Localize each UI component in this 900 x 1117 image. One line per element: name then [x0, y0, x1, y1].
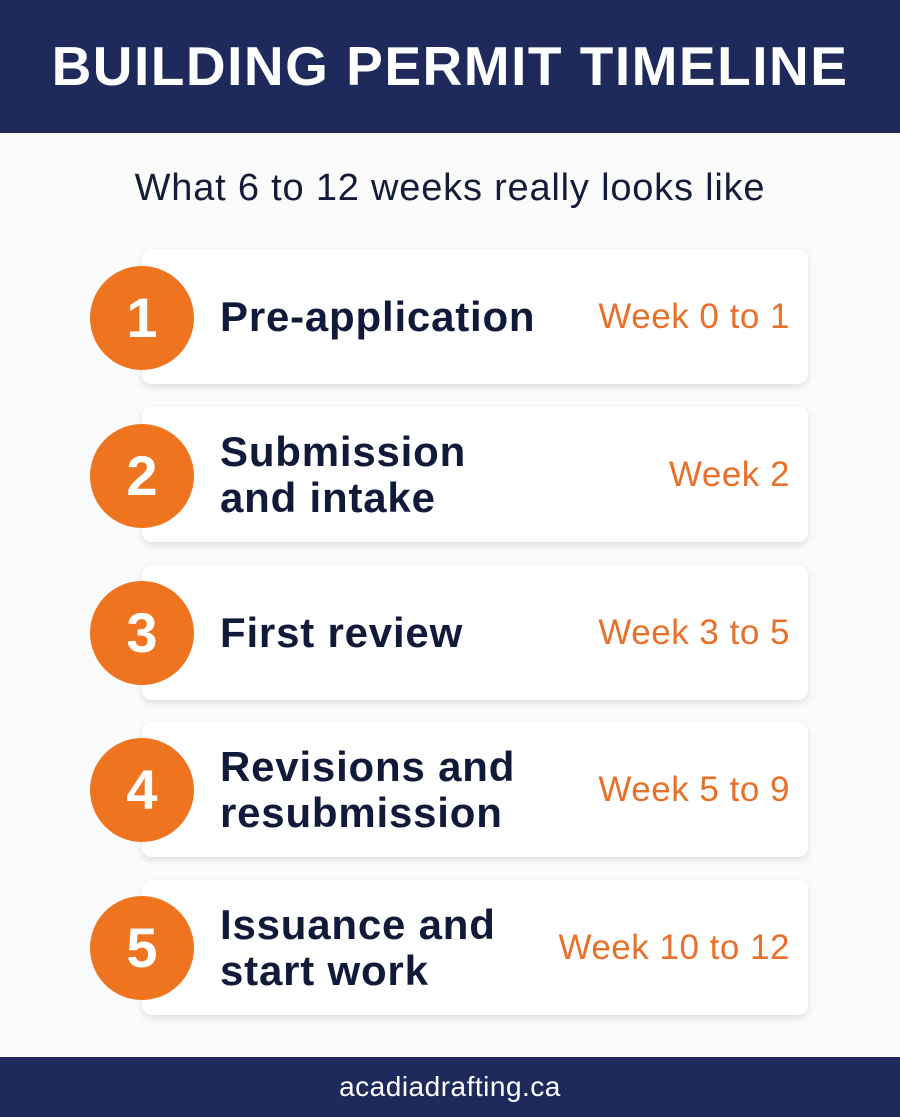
icon: number 1	[90, 266, 194, 370]
card: step 4	[142, 722, 808, 857]
card: step 2	[142, 407, 808, 542]
card: step 2: Submission	[220, 428, 466, 474]
title	[0, 0, 900, 133]
icon: number 4: 4	[126, 758, 158, 821]
icon: number 5: 5	[126, 916, 158, 979]
card: step 4: resubmission	[220, 788, 503, 836]
card: step 5: Week 10 to 12	[558, 928, 790, 966]
card: step 1: Week 0 to 1	[598, 296, 790, 336]
icon: number 2: 2	[126, 444, 158, 507]
card: step 1: Pre-application	[220, 292, 535, 340]
icon: number 4	[90, 738, 194, 842]
icon: number 2	[90, 424, 194, 528]
icon: number 3	[90, 581, 194, 685]
card: step 3: First review	[220, 608, 463, 656]
card: step 5	[142, 880, 808, 1015]
icon: number 1: 1	[126, 286, 158, 349]
title: BUILDING PERMIT TIMELINE	[52, 35, 848, 97]
footer: acadiadrafting.ca	[339, 1071, 561, 1102]
card: step 3: Week 3 to 5	[598, 612, 790, 652]
subtitle: What 6 to 12 weeks really looks like	[135, 167, 765, 209]
card: step 4: Week 5 to 9	[598, 770, 790, 808]
card: step 4: Revisions and	[220, 742, 515, 790]
card: step 2: Week 2	[669, 454, 790, 494]
icon: number 5	[90, 896, 194, 1000]
card: step 5: Issuance and	[220, 900, 496, 948]
card: step 1	[142, 249, 808, 384]
card: step 3	[142, 565, 808, 700]
card: step 2: and intake	[220, 474, 436, 520]
icon: number 3: 3	[126, 601, 158, 664]
card: step 5: start work	[220, 946, 429, 994]
footer	[0, 1057, 900, 1117]
